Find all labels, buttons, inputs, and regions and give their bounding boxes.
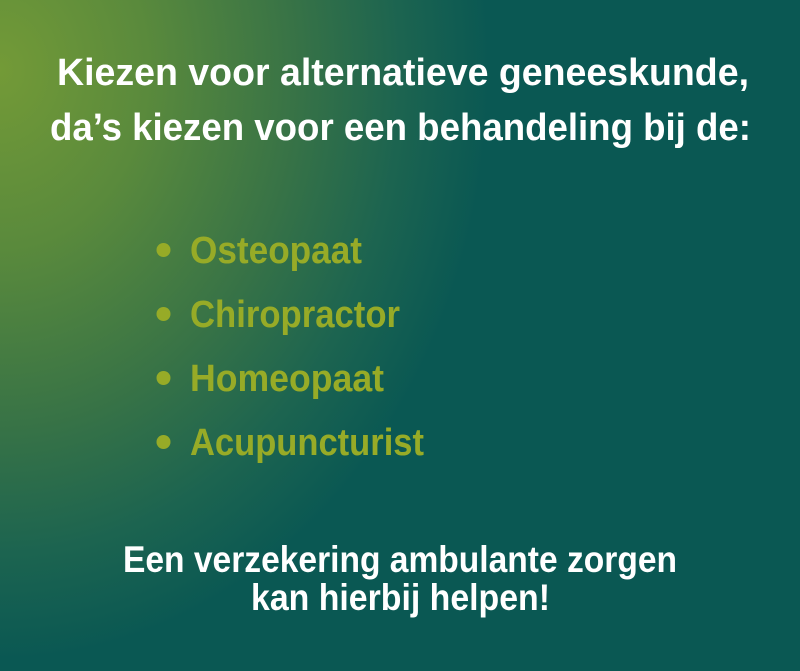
title: da’s kiezen voor een behandeling bij de: — [50, 107, 751, 149]
list item: Homeopaat: Homeopaat — [190, 358, 384, 400]
closing statement: kan hierbij helpen! — [251, 577, 550, 618]
title — [50, 52, 751, 149]
title: Kiezen voor alternatieve geneeskunde, — [57, 52, 749, 94]
list of treatments — [156, 230, 424, 464]
closing statement: Een verzekering ambulante zorgen — [123, 539, 677, 580]
list item: Osteopaat: Osteopaat — [190, 230, 362, 272]
closing statement — [123, 539, 677, 618]
list item: Chiropractor: Chiropractor — [190, 294, 400, 336]
list item: Acupuncturist: Acupuncturist — [190, 422, 424, 464]
